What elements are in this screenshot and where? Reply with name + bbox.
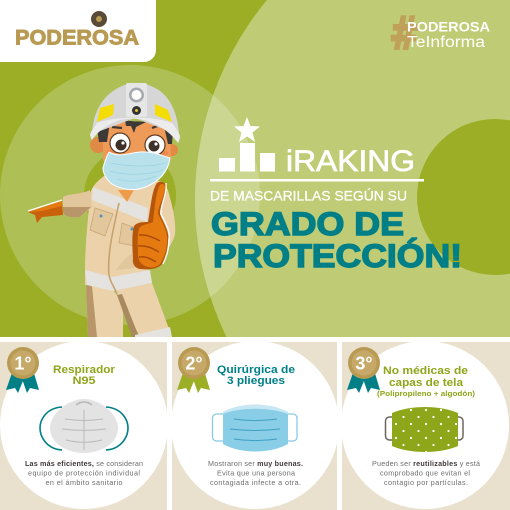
description: contagiada infecte a otra.: [210, 478, 301, 487]
description: en el ámbito sanitario: [46, 478, 122, 487]
logo panel: PODEROSA: [15, 26, 139, 50]
panel: respirador N95: [0, 341, 168, 510]
title: Quirúrgica de: [217, 364, 295, 376]
description: contagio por partículas.: [384, 478, 468, 487]
divider line: [210, 179, 424, 182]
description: Mostraron ser muy buenas.: [208, 459, 303, 468]
face mask: [103, 152, 170, 190]
title: (Polipropileno + algodón): [377, 389, 476, 398]
panel: no médicas: [341, 341, 510, 510]
hashtag: PoderosaTeInforma: #: [389, 7, 420, 60]
heading: grado de: GRADO DE: [211, 206, 404, 242]
logo panel: [0, 0, 156, 62]
title: [53, 364, 116, 387]
hashtag: PoderosaTeInforma: PODEROSA: [407, 18, 490, 34]
title: capas de tela: [389, 377, 464, 389]
hashtag: PoderosaTeInforma: TeInforma: [407, 34, 485, 51]
description: [25, 459, 143, 487]
title block: [210, 117, 462, 274]
heading: iRAKING: iRAKING: [286, 145, 415, 178]
eyes: [110, 133, 165, 155]
ribbon and medal 2: [177, 347, 210, 393]
worker character: [28, 83, 180, 337]
description: Las más eficientes, se consideran: [25, 459, 143, 468]
ribbon and medal 3: 3°: [355, 354, 373, 374]
description: [372, 459, 480, 487]
description: equipo de protección individual: [28, 468, 140, 478]
title: [377, 365, 476, 398]
ribbon and medal 2: 2°: [185, 354, 203, 374]
subheading: DE MASCARILLAS SEGÚN SU: [210, 188, 407, 204]
panel: quirúrgica: [171, 341, 339, 510]
title: [217, 364, 295, 387]
description: comprobado que evitan el: [380, 468, 470, 478]
helmet: [90, 83, 180, 143]
left arm and glove: [28, 190, 92, 223]
title: No médicas de: [383, 365, 468, 377]
description: Evita que una persona: [217, 468, 295, 478]
description: Pueden ser reutilizables y está: [372, 459, 480, 468]
heading: protección: PROTECCIÓN!: [213, 238, 462, 274]
legs: [86, 283, 172, 337]
icon: surgical mask: [212, 404, 297, 452]
ribbon and medal 3: [347, 347, 380, 393]
icon: N95 respirator: [40, 399, 128, 453]
title: 3 pliegues: [227, 375, 285, 387]
head: [90, 120, 178, 162]
description: [208, 459, 303, 487]
icon: ranking podium and star: [219, 117, 275, 172]
hero background: [0, 0, 510, 337]
icon: cloth mask: [386, 407, 463, 452]
title: Respirador: [53, 364, 116, 376]
title: N95: [72, 375, 96, 387]
ribbon and medal 1: 1°: [14, 354, 32, 374]
thumbs-up glove: [132, 182, 169, 269]
ribbon and medal 1: [6, 347, 39, 393]
torso: [85, 176, 175, 294]
hashtag: PoderosaTeInforma: [389, 7, 490, 60]
